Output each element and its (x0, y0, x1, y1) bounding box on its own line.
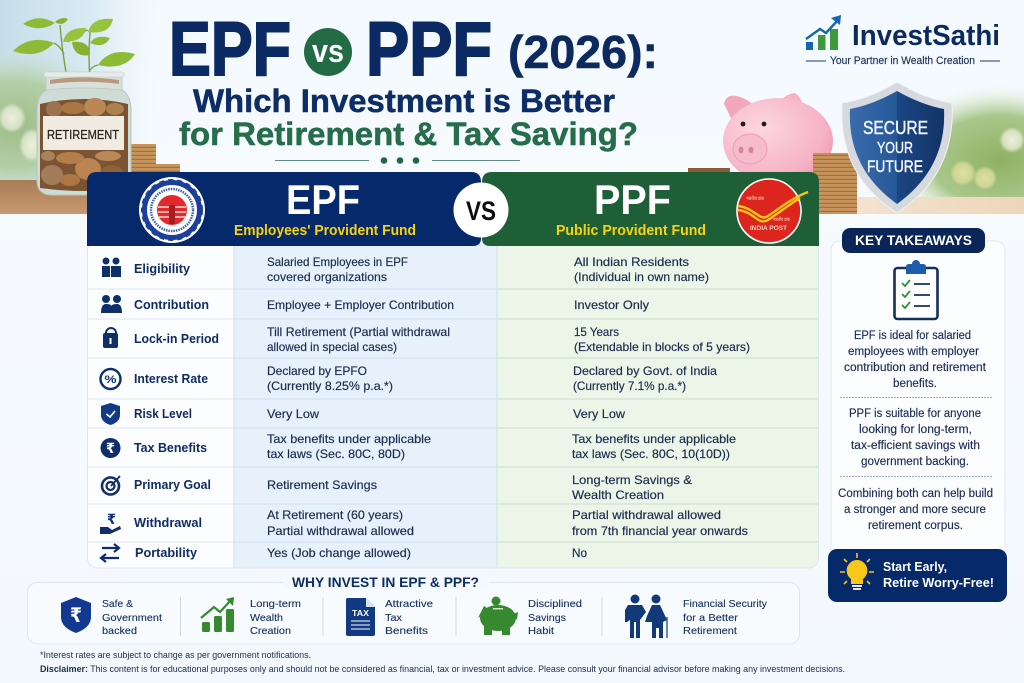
main title (169, 7, 658, 164)
icon: swap arrows (101, 544, 119, 562)
PPF header (482, 172, 819, 246)
icon: percent badge: % (104, 374, 117, 386)
icon: green piggy (478, 596, 518, 635)
shield text: YOUR (877, 140, 913, 157)
icon: growth chart (806, 15, 841, 50)
why invest heading: WHY INVEST IN EPF & PPF? (292, 574, 479, 590)
row: interest rate: Declared by EPFO (267, 364, 367, 378)
illustration: coin stack right (813, 153, 857, 214)
panel: key takeaways (828, 228, 1007, 602)
brand logo (806, 15, 1000, 67)
icon: India Post emblem (737, 179, 808, 243)
row: interest rate: Interest Rate (134, 372, 208, 386)
row: eligibility (102, 255, 709, 284)
PPF header: PPF (594, 176, 671, 223)
row: withdrawal: from 7th financial year onwards (572, 524, 748, 538)
takeaway: PPF: government backing. (861, 456, 969, 468)
row: risk level: Very Low (573, 407, 625, 421)
row: interest rate: Declared by Govt. of India (573, 364, 717, 378)
illustration: piggy bank (688, 93, 833, 184)
key takeaways heading (842, 228, 985, 253)
takeaway: EPF (844, 330, 987, 390)
takeaway: combining: retirement corpus. (868, 520, 963, 532)
row: contribution: Employee + Employer Contribution (267, 298, 454, 312)
coin stacks beside jar (112, 144, 180, 172)
comparison table (87, 172, 819, 568)
key takeaways heading: KEY TAKEAWAYS (855, 232, 972, 248)
row: withdrawal: Partial withdrawal allowed (267, 524, 414, 538)
takeaway: PPF: tax-efficient savings with (851, 440, 980, 452)
icon: group (101, 295, 122, 313)
EPF header: Employees' Provident Fund (234, 223, 416, 239)
benefit: tax: Tax (385, 612, 403, 624)
icon: target (102, 476, 120, 494)
table body (87, 240, 819, 568)
row: eligibility: covered organizations (267, 270, 387, 284)
illustration: shield (842, 82, 952, 213)
row: tax benefits: Tax Benefits (134, 441, 207, 455)
row: lock-in period: 15 Years (574, 325, 619, 339)
disclaimer: Disclaimer: This content is for educational purposes only and should not be considered as financial, tax or investment advice. Please consult your financial advisor before making any investment decisions. (40, 664, 845, 674)
photo: wooden shelf right (855, 197, 1024, 214)
takeaway: PPF (849, 408, 981, 468)
glass jar (37, 72, 131, 195)
call to action: Retire Worry-Free! (883, 575, 994, 590)
icon: light bulb (840, 553, 874, 590)
benefit: retirement (625, 594, 768, 638)
row: tax benefits: tax laws (Sec. 80C, 80D) (267, 447, 405, 461)
icon: clipboard checklist (894, 260, 938, 319)
benefit: savings: Disciplined (528, 598, 582, 610)
plant (13, 18, 135, 78)
icon: check shield (101, 403, 120, 425)
row: lock-in period (103, 325, 750, 354)
call to action: Start Early, (883, 559, 947, 574)
benefit: tax: Benefits (385, 625, 428, 637)
call to action (828, 549, 1007, 602)
VS badge: VS (466, 196, 496, 226)
row: primary goal: Retirement Savings (267, 478, 377, 492)
benefit: safe (61, 597, 162, 637)
icon: India Post emblem: भारतीय डाक (746, 195, 764, 202)
title line 3: for Retirement & Tax Saving? (179, 116, 638, 152)
benefit: wealth (201, 597, 301, 637)
takeaway: EPF: EPF is ideal for salaried (854, 330, 971, 342)
icon: EPFO emblem (139, 177, 205, 243)
benefit: savings: Habit (528, 625, 554, 637)
title line 1 (169, 7, 658, 92)
row: withdrawal (100, 508, 748, 538)
row: lock-in period: Till Retirement (Partial withdrawal (267, 325, 450, 339)
row: portability: Yes (Job change allowed) (267, 546, 411, 560)
row: lock-in period: allowed in special cases) (267, 340, 397, 354)
row: tax benefits: Tax benefits under applicable (267, 432, 431, 446)
title divider (275, 157, 520, 164)
panel: why invest (28, 574, 800, 644)
tagline: Your Partner in Wealth Creation (830, 55, 975, 67)
row: risk level (101, 403, 625, 425)
icon: rupee shield: ₹ (70, 603, 82, 627)
row: withdrawal: At Retirement (60 years) (267, 508, 403, 522)
takeaway: combining: Combining both can help build (838, 488, 993, 500)
icon: padlock (103, 328, 118, 348)
takeaway: EPF: contribution and retirement (844, 362, 987, 374)
photo: blurred garden backdrop right (918, 90, 1024, 197)
benefit: wealth: Wealth (250, 612, 283, 624)
benefit: wealth: Creation (250, 625, 291, 637)
row: eligibility: Eligibility (134, 262, 190, 276)
photo: blurred garden backdrop left (0, 0, 170, 214)
row: lock-in period: Lock-in Period (134, 332, 219, 346)
shield text: FUTURE (867, 157, 923, 176)
row: primary goal: Long-term Savings & (572, 473, 692, 487)
icon: growth bars (201, 597, 234, 632)
footnote: *Interest rates are subject to change as per government notifications. (40, 650, 311, 660)
row: interest rate (100, 364, 717, 393)
takeaway: combining: a stronger and more secure (844, 504, 986, 516)
title line 1: vs (312, 33, 344, 69)
illustration: money jar with plant (13, 18, 180, 195)
brand logo: InvestSathi (852, 20, 1000, 52)
icon: rupee coin (100, 438, 120, 458)
PPF header: Public Provident Fund (556, 223, 706, 239)
row: primary goal: Primary Goal (134, 478, 211, 492)
benefit: savings (478, 596, 582, 637)
row: withdrawal: Withdrawal (134, 516, 202, 530)
benefit: safe: Government (102, 612, 162, 624)
row: contribution (101, 295, 649, 313)
row: primary goal: Wealth Creation (572, 488, 664, 502)
icon: people (102, 258, 121, 277)
row: contribution: Contribution (134, 298, 209, 312)
row: contribution: Investor Only (574, 298, 649, 312)
row: tax benefits (100, 432, 736, 461)
row: portability (101, 544, 587, 562)
row: risk level: Very Low (267, 407, 319, 421)
takeaway: EPF: benefits. (893, 378, 937, 390)
title line 1: PPF (366, 7, 492, 92)
row: portability: No (572, 546, 587, 560)
title line 1: EPF (169, 7, 291, 92)
icon: India Post emblem: भारतीय डाक (773, 216, 790, 223)
jar label (43, 116, 124, 150)
row: primary goal (102, 473, 692, 502)
row: eligibility: (Individual in own name) (574, 270, 709, 284)
title line 1: (2026): (508, 26, 658, 78)
benefit: tax: Attractive (385, 598, 433, 610)
icon: hand with rupee (100, 512, 121, 534)
EPF header (87, 172, 481, 246)
icon: India Post emblem: INDIA POST (750, 225, 787, 232)
benefit: tax (346, 598, 433, 637)
icon: percent badge (100, 369, 120, 389)
takeaway: combining (838, 488, 993, 532)
row: interest rate: (Currently 8.25% p.a.*) (267, 379, 393, 393)
shield text: SECURE (863, 118, 928, 138)
row: withdrawal: Partial withdrawal allowed (572, 508, 721, 522)
row: eligibility: Salaried Employees in EPF (267, 255, 408, 269)
benefit: retirement: Retirement (683, 625, 737, 637)
benefit: retirement: Financial Security (683, 598, 768, 610)
row: tax benefits: tax laws (Sec. 80C, 10(10D)) (572, 447, 730, 461)
takeaway: PPF: looking for long-term, (859, 424, 972, 436)
row: portability: Portability (135, 546, 197, 560)
row: eligibility: All Indian Residents (574, 255, 689, 269)
row: risk level: Risk Level (134, 407, 192, 421)
title line 2: Which Investment is Better (193, 83, 615, 119)
row: lock-in period: (Extendable in blocks of 5 years) (574, 340, 750, 354)
benefit: wealth: Long-term (250, 598, 301, 610)
benefit: safe: Safe & (102, 598, 133, 610)
benefit: safe: backed (102, 625, 137, 637)
icon: tax document: TAX (352, 608, 369, 618)
takeaway: EPF: employees with employer (848, 346, 979, 358)
row: tax benefits: Tax benefits under applicable (572, 432, 736, 446)
shield text (863, 118, 928, 176)
row: interest rate: (Currently 7.1% p.a.*) (573, 379, 686, 393)
benefit: retirement: for a Better (683, 612, 739, 624)
icon: rupee coin: ₹ (106, 441, 115, 457)
icon: hand with rupee: ₹ (107, 512, 116, 528)
VS badge (454, 182, 508, 238)
EPF header: EPF (286, 176, 360, 223)
icon: elderly couple (625, 594, 667, 638)
benefit: savings: Savings (528, 612, 566, 624)
takeaway: PPF: PPF is suitable for anyone (849, 408, 981, 420)
jar label: RETIREMENT (47, 127, 119, 142)
